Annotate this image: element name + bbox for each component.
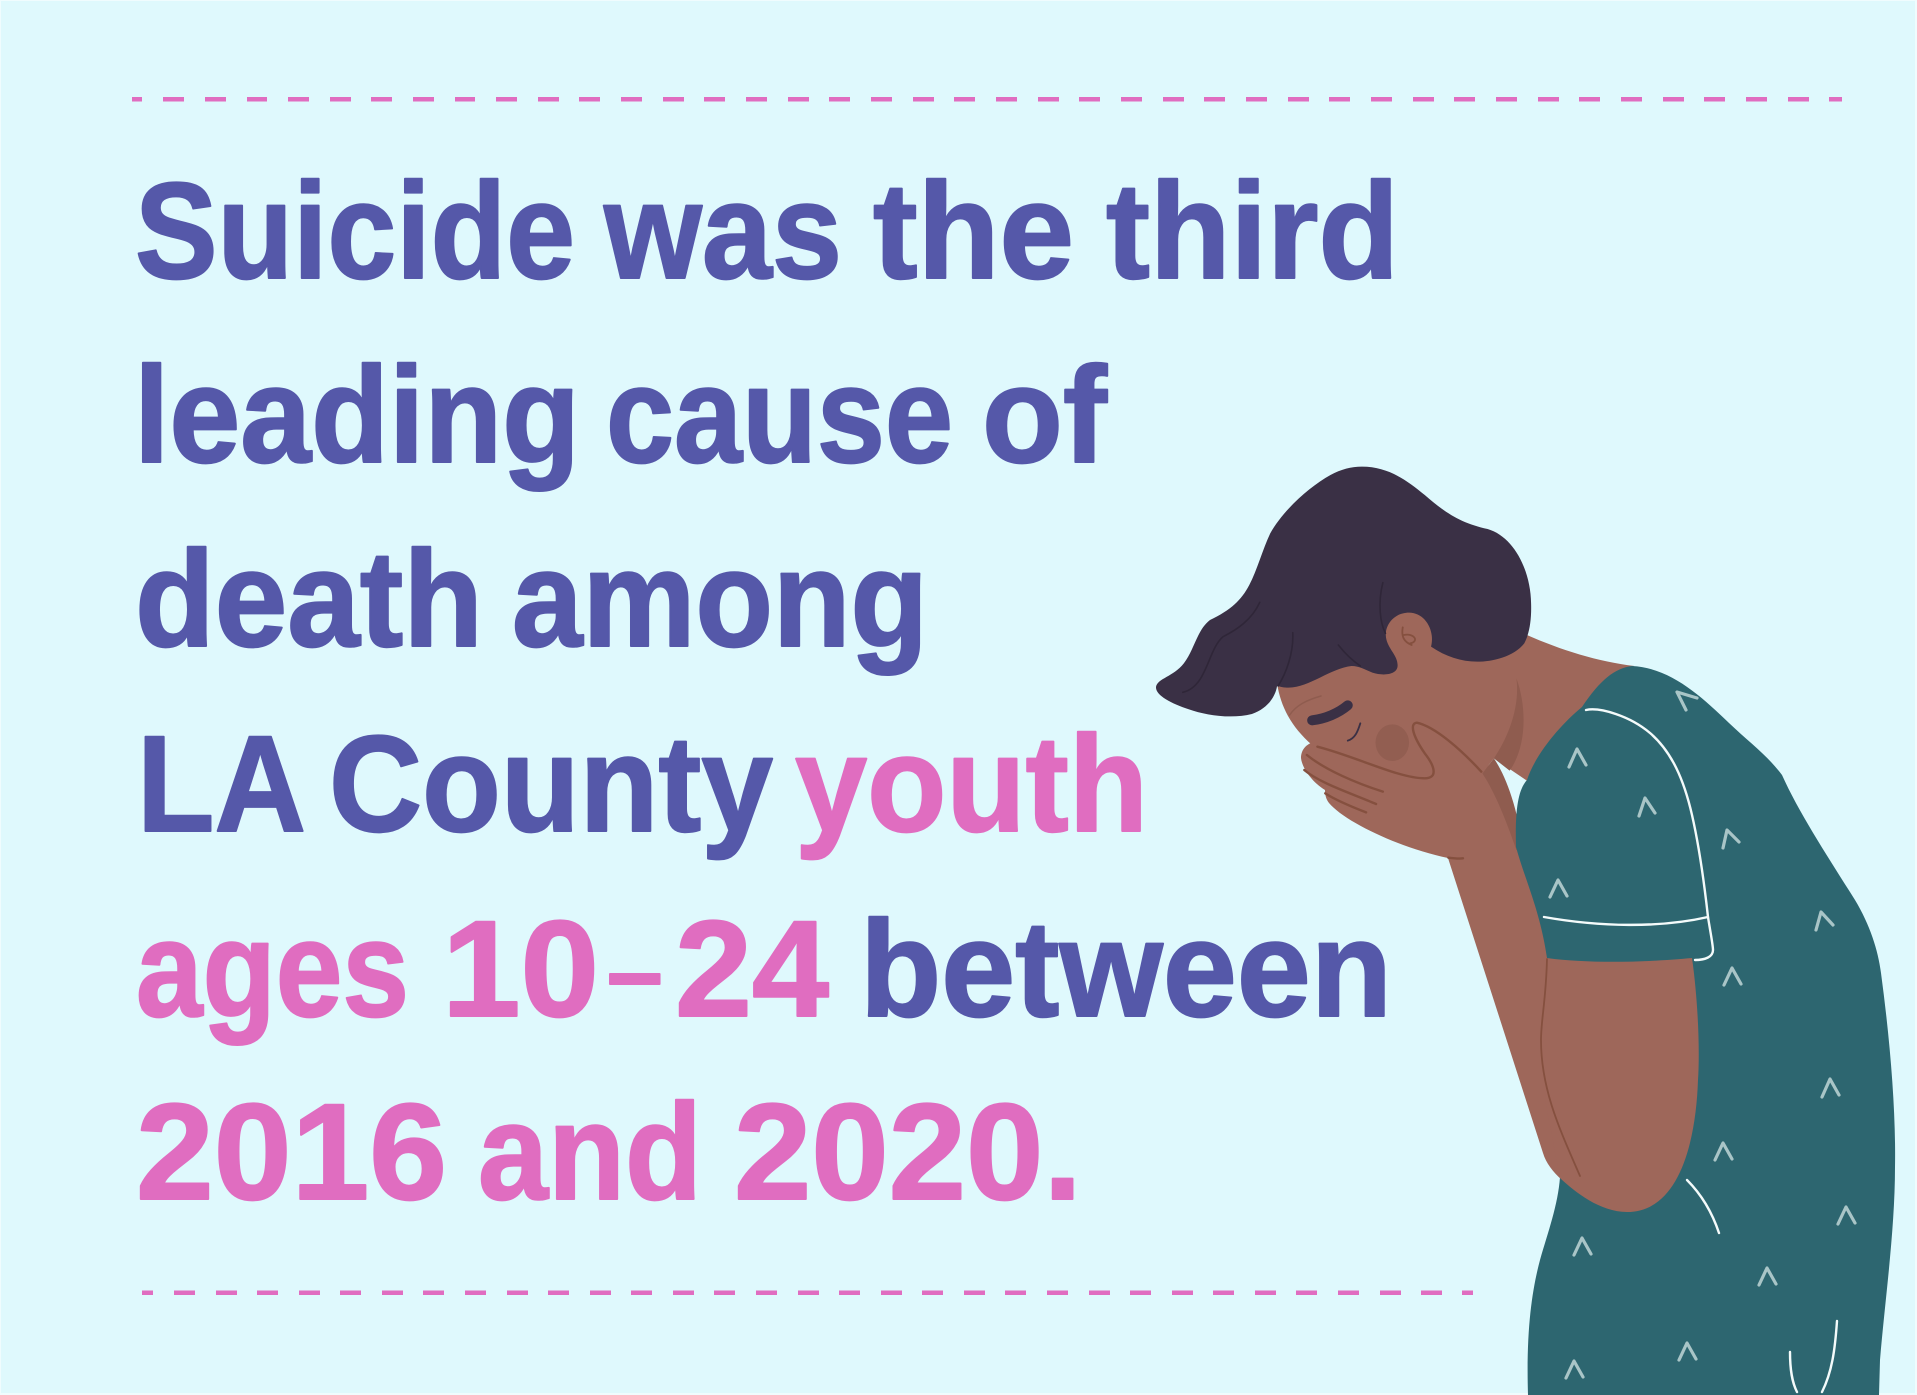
arm crease: [1541, 959, 1580, 1176]
brow wrinkle: [1290, 696, 1321, 715]
hair strands: [1183, 583, 1385, 692]
line 5: 24: [675, 893, 829, 1046]
shirt chevron pattern: [1550, 692, 1855, 1378]
top dashed divider: [132, 97, 1842, 102]
line 1: third: [1106, 155, 1399, 308]
illustration: person covering their face: [1156, 467, 1895, 1395]
line 5: –: [607, 916, 663, 1028]
line 1: the: [873, 155, 1074, 308]
line 4: [137, 708, 1148, 861]
sleeve seam lines: [1544, 709, 1837, 1392]
shirt body and sleeve: [1516, 666, 1895, 1395]
line 5: ages: [136, 893, 409, 1046]
line 3: among: [512, 523, 928, 676]
line 4: LA: [137, 708, 306, 861]
line 3: [135, 523, 928, 676]
ear detail: [1402, 627, 1415, 645]
line 5: 10: [442, 893, 599, 1046]
line 2: cause: [606, 339, 953, 492]
line 1: was: [603, 155, 842, 308]
bottom dashed divider: [142, 1290, 1473, 1295]
line 6: 2016: [136, 1076, 447, 1229]
cheek: [1376, 724, 1409, 761]
line 1: [135, 155, 1399, 308]
hair: [1156, 467, 1531, 716]
upper arm: [1545, 958, 1699, 1212]
line 4: County: [329, 708, 773, 861]
line 6: 2020.: [734, 1076, 1082, 1229]
hair shape: [1156, 467, 1531, 716]
thumb and finger outlines: [1304, 723, 1481, 859]
line 1: Suicide: [135, 155, 575, 308]
line 6: and: [478, 1076, 702, 1229]
line 2: of: [982, 339, 1107, 492]
line 5: between: [860, 893, 1392, 1046]
line 2: leading: [134, 339, 580, 492]
line 4: youth: [795, 708, 1148, 861]
line 6: [136, 1076, 1082, 1229]
tear line: [1348, 723, 1360, 741]
heading text: [134, 155, 1399, 1229]
forearm shadow: [1482, 758, 1524, 853]
line 3: death: [135, 523, 483, 676]
head, face and neck: [1277, 597, 1634, 859]
closed eye: [1312, 705, 1348, 720]
forearm and hand: [1301, 730, 1600, 1180]
head and neck shape: [1277, 597, 1634, 781]
neck shadow: [1494, 678, 1524, 771]
line 5: [136, 893, 1392, 1046]
line 2: [134, 339, 1107, 492]
